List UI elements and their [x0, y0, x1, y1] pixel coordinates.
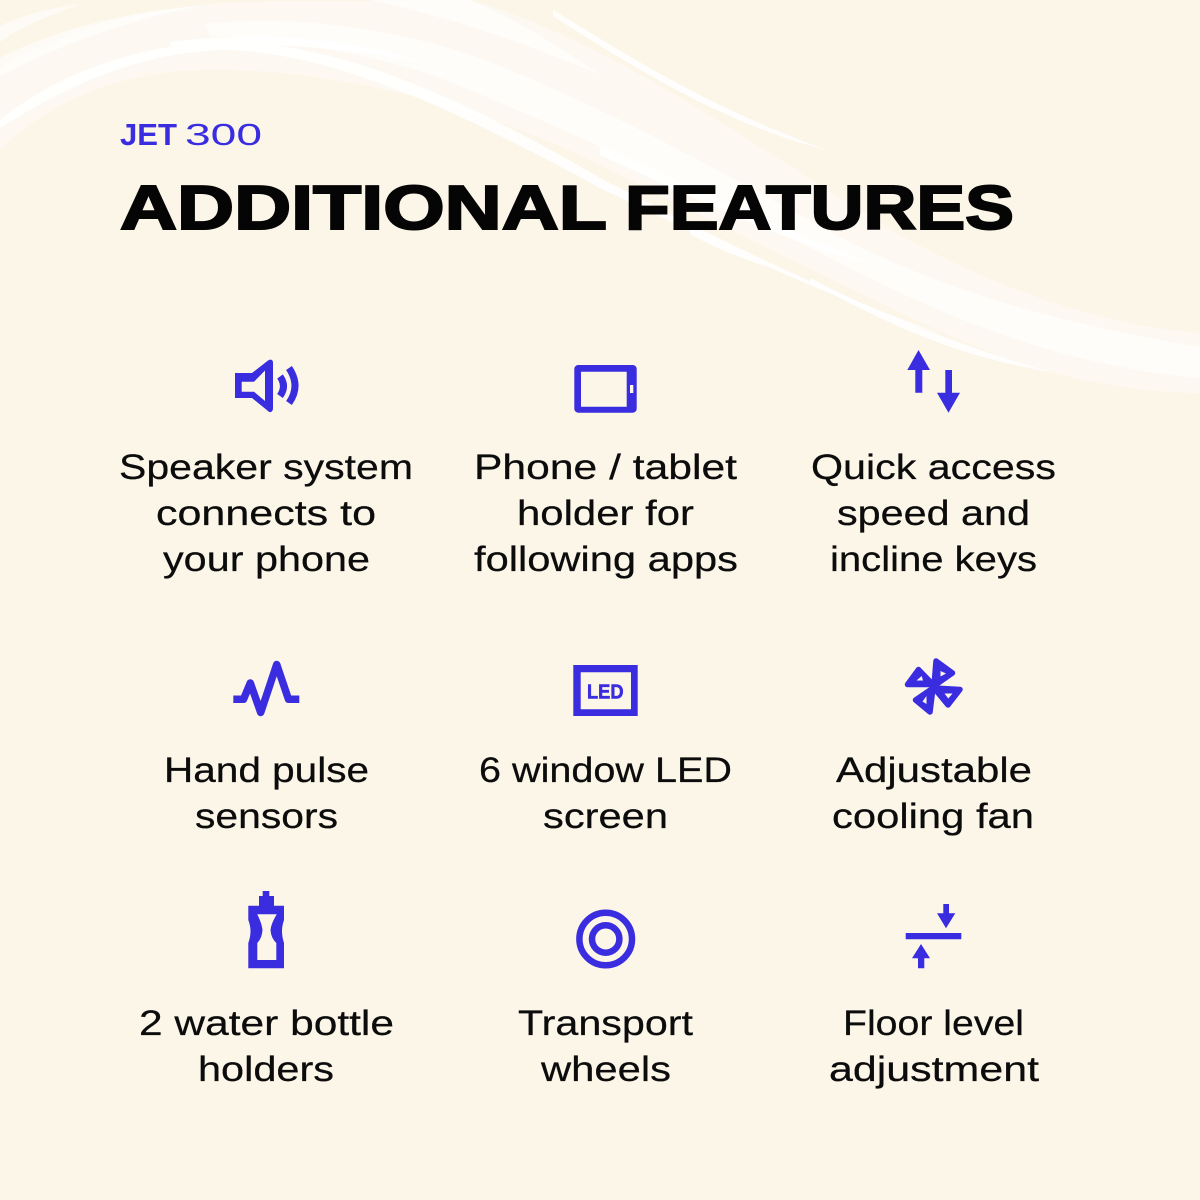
text: LED screen — [479, 750, 732, 836]
title — [120, 174, 1014, 243]
icon: up and down arrows — [907, 350, 960, 413]
brand label — [120, 117, 262, 152]
feature: speaker system — [119, 360, 413, 579]
brand label: 300 — [185, 117, 262, 152]
feature: water bottle holders — [139, 891, 394, 1089]
text: quick keys: Quick access — [811, 447, 1056, 487]
icon: water bottle — [248, 891, 284, 968]
text: water bottle holders — [139, 1003, 394, 1089]
feature: LED screen — [479, 665, 732, 836]
feature: quick keys — [811, 350, 1056, 579]
icon: pulse — [233, 664, 299, 712]
icon: wheel — [579, 913, 632, 965]
title: ADDITIONAL — [120, 174, 607, 243]
feature: pulse sensors — [164, 664, 369, 836]
text: tablet holder — [474, 447, 738, 579]
text: water bottle holders: 2 water bottle — [139, 1003, 394, 1043]
icon: LED: LED — [587, 680, 624, 703]
text: pulse sensors: sensors — [195, 796, 338, 836]
text: water bottle holders: holders — [198, 1049, 334, 1089]
text: speaker system: Speaker system — [119, 447, 413, 487]
text: cooling fan: Adjustable — [836, 750, 1032, 790]
text: LED screen: screen — [543, 796, 668, 836]
text: tablet holder: holder for — [517, 493, 694, 533]
icon: level arrows — [906, 904, 961, 968]
text: cooling fan: cooling fan — [832, 796, 1034, 836]
text: quick keys: speed and — [837, 493, 1030, 533]
icon: tablet — [574, 365, 637, 413]
text: speaker system: your phone — [163, 539, 370, 579]
title: FEATURES — [625, 174, 1014, 243]
icon: speaker — [235, 360, 295, 412]
text: LED screen: 6 window LED — [479, 750, 732, 790]
text: pulse sensors: Hand pulse — [164, 750, 369, 790]
feature: tablet holder — [474, 365, 738, 579]
feature: floor level adjustment — [829, 904, 1039, 1089]
text: transport wheels: Transport — [518, 1003, 693, 1043]
text: pulse sensors — [164, 750, 369, 836]
feature: cooling fan — [832, 661, 1034, 836]
icon: fan — [908, 661, 960, 712]
text: speaker system: connects to — [156, 493, 376, 533]
text: floor level adjustment: Floor level — [843, 1003, 1024, 1043]
text: transport wheels — [518, 1003, 693, 1089]
text: tablet holder: following apps — [474, 539, 738, 579]
text: cooling fan — [832, 750, 1034, 836]
icon: LED — [573, 665, 638, 716]
text: floor level adjustment: adjustment — [829, 1049, 1039, 1089]
feature: transport wheels — [518, 913, 693, 1089]
text: quick keys: incline keys — [830, 539, 1037, 579]
text: floor level adjustment — [829, 1003, 1039, 1089]
text: tablet holder: Phone / tablet — [474, 447, 737, 487]
text: speaker system — [119, 447, 413, 579]
text: transport wheels: wheels — [540, 1049, 671, 1089]
text: quick keys — [811, 447, 1056, 579]
brand label: JET — [120, 117, 177, 152]
